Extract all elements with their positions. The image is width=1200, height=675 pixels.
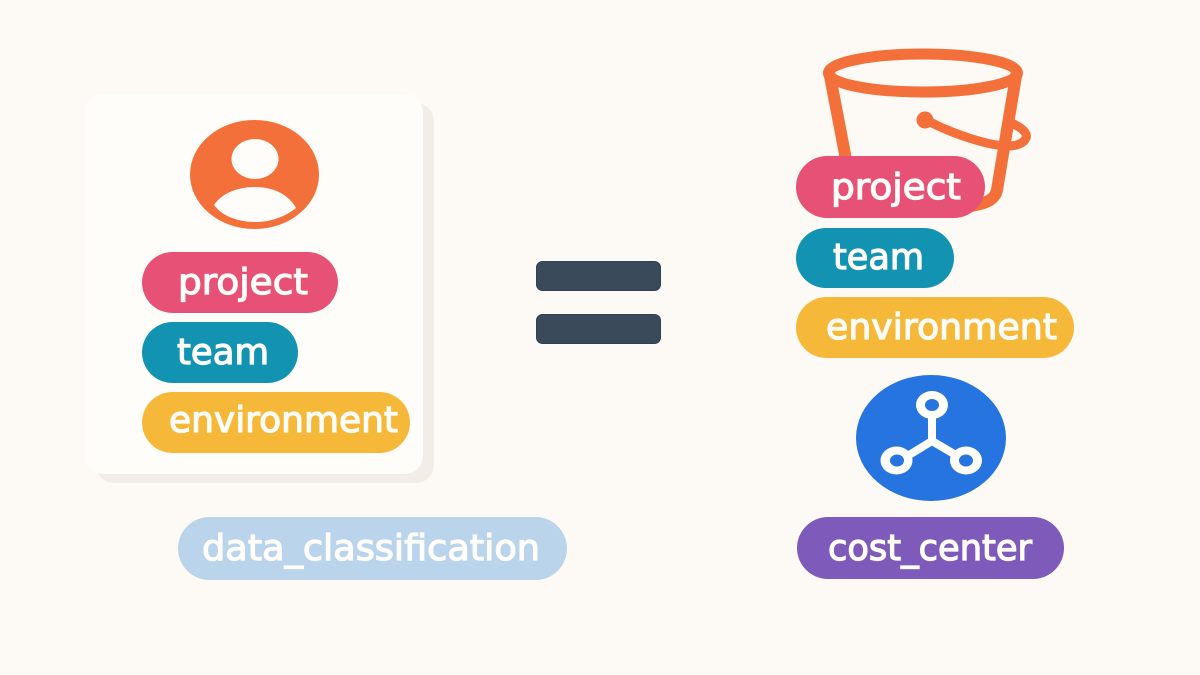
tag: environment [142, 392, 410, 453]
icon: network hub [856, 375, 1006, 501]
tag: team: team [177, 332, 269, 373]
tag: team [142, 322, 298, 383]
tag: project: project [178, 262, 308, 303]
tag: team (bucket): team [833, 237, 924, 278]
tag: data_classification: data_classification [202, 528, 540, 569]
tag: cost_center: cost_center [828, 528, 1032, 569]
tag: environment: environment [169, 400, 398, 441]
icon: storage bucket [828, 54, 1026, 206]
tag: project (bucket) [796, 156, 985, 218]
icon: user avatar [190, 120, 319, 229]
tag: project [142, 252, 338, 313]
tag: environment (bucket): environment [826, 307, 1057, 348]
tag: environment (bucket) [796, 297, 1074, 358]
tag: team (bucket) [796, 228, 954, 288]
tag: cost_center [797, 517, 1064, 579]
card surface [85, 94, 423, 474]
icon: equals sign [536, 262, 660, 344]
card shadow [96, 103, 434, 483]
tag: project (bucket): project [831, 167, 961, 208]
tag: data_classification [178, 517, 567, 580]
panel: user tags card [85, 94, 434, 483]
